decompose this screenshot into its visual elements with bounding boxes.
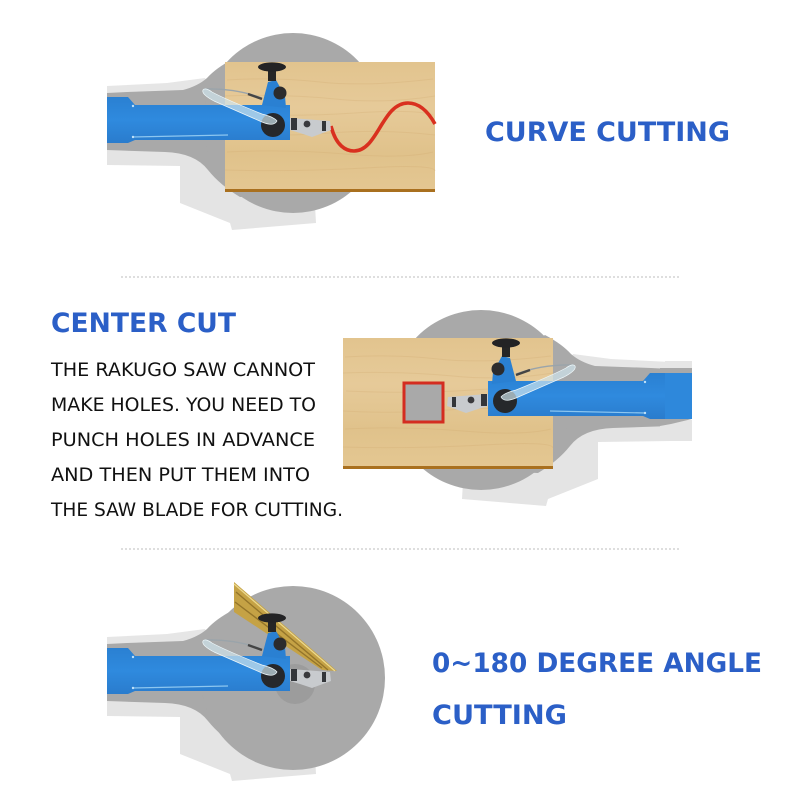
heading: curve cutting: CURVE CUTTING [485,117,730,148]
panel: curve cutting illustration [107,33,435,230]
mitre moulding [234,582,337,671]
heading: angle cutting [432,648,762,731]
text block: center cut description: THE RAKUGO SAW CANNOT [50,359,315,381]
wood board with square cut [343,338,553,469]
panel: center cut illustration [343,310,692,506]
text block: center cut description: THE SAW BLADE FOR CUTTING. [50,499,343,521]
text block: center cut description [50,359,343,521]
panel: angle cutting illustration [107,582,385,781]
text block: center cut description: MAKE HOLES. YOU NEED TO [51,394,316,416]
text block: center cut description: AND THEN PUT THEM INTO [51,464,310,486]
heading: angle cutting: CUTTING [432,700,567,731]
heading: center cut: CENTER CUT [51,308,237,339]
heading: angle cutting: 0~180 DEGREE ANGLE [432,648,762,679]
text block: center cut description: PUNCH HOLES IN ADVANCE [51,429,315,451]
wood board with curve [225,62,435,192]
shadow under clamp [275,664,315,704]
